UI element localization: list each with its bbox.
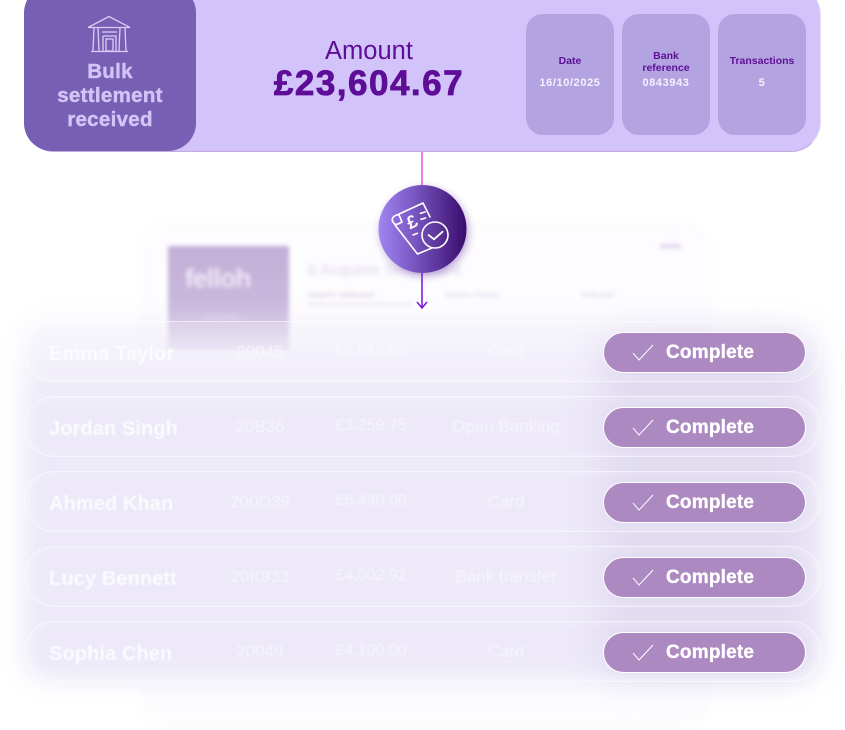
status text: Complete	[666, 567, 754, 588]
payment type: Card	[488, 342, 524, 361]
blurred logo sidebar	[168, 246, 289, 350]
connector arrow: violet	[416, 272, 428, 309]
row: Ahmed Khan	[24, 471, 821, 532]
bank reference value: 0843943	[642, 77, 690, 89]
heading: bulk settlement received: settlement	[57, 84, 163, 107]
customer name: Lucy Bennett	[49, 568, 177, 590]
blurred tab labels	[308, 291, 615, 299]
blurred tab underline	[308, 303, 413, 305]
connector line: pink	[421, 151, 423, 187]
blurred panel heading: b Acquirer Settlement	[308, 262, 461, 279]
transactions value: 5	[759, 77, 765, 89]
customer name: Ahmed Khan	[49, 493, 173, 515]
tile: transactions	[718, 14, 806, 135]
amount value: £23,604.67	[274, 64, 464, 103]
glow behind status buttons	[600, 338, 808, 676]
amount label: Amount	[325, 37, 413, 65]
payment type: Bank transfer	[455, 567, 557, 586]
payment type: Open Banking	[452, 417, 560, 436]
transactions label: Transactions	[730, 55, 794, 67]
bank reference label: reference	[642, 62, 690, 74]
pound sign on receipt: £	[403, 211, 421, 233]
heading: bulk settlement received: Bulk	[87, 60, 133, 83]
icon: bank building	[88, 16, 130, 52]
status text: Complete	[666, 642, 754, 663]
status button	[603, 557, 806, 598]
amount: £4,100.00	[335, 642, 407, 659]
reference: 20B36	[235, 417, 285, 436]
tile: bank reference	[622, 14, 710, 135]
row: Emma Taylor	[24, 321, 821, 382]
glow behind rows	[22, 318, 822, 682]
row: Jordan Singh	[24, 396, 821, 457]
panel: settlement summary	[24, 0, 821, 152]
blurred tab labels: Acquirer Charges	[445, 292, 499, 299]
bank reference label	[642, 50, 690, 74]
customer name: Sophia Chen	[49, 643, 172, 665]
amount: £4,002.92	[335, 567, 407, 584]
heading: bulk settlement received	[57, 60, 163, 131]
status button	[603, 482, 806, 523]
reference: 20K933	[231, 567, 289, 586]
status text: Complete	[666, 342, 754, 363]
date value: 16/10/2025	[539, 77, 601, 89]
status button	[603, 632, 806, 673]
icon: receipt with tick in gradient circle	[376, 183, 474, 281]
blurred tab labels: Acquirer Settlement	[308, 292, 375, 299]
status button	[603, 407, 806, 448]
heading: bulk settlement received: received	[67, 108, 153, 131]
row: Lucy Bennett	[24, 546, 821, 607]
amount: £6,430.00	[335, 492, 407, 509]
customer name: Emma Taylor	[49, 343, 174, 365]
amount: £5,812.00	[335, 342, 407, 359]
blurred logo text: felloh	[185, 263, 251, 293]
blurred background settlement panel	[146, 225, 706, 725]
payment type: Card	[488, 492, 524, 511]
status text: Complete	[666, 417, 754, 438]
status button	[603, 332, 806, 373]
tile: date	[526, 14, 614, 135]
date label: Date	[559, 55, 581, 67]
amount: £3,259.75	[335, 417, 407, 434]
bank reference label: Bank	[653, 50, 679, 62]
blurred tab labels: Disbursals	[582, 292, 615, 299]
reference: 20045	[236, 342, 284, 361]
payment type: Card	[488, 642, 524, 661]
reference: 200D39	[230, 492, 290, 511]
blurred menu item: ▢ Insights	[185, 311, 239, 323]
customer name: Jordan Singh	[49, 418, 178, 440]
status text: Complete	[666, 492, 754, 513]
blurred top corner mark	[660, 244, 681, 248]
panel: bulk settlement label	[24, 0, 196, 151]
row: Sophia Chen	[24, 621, 821, 682]
reference: 20049	[236, 642, 284, 661]
